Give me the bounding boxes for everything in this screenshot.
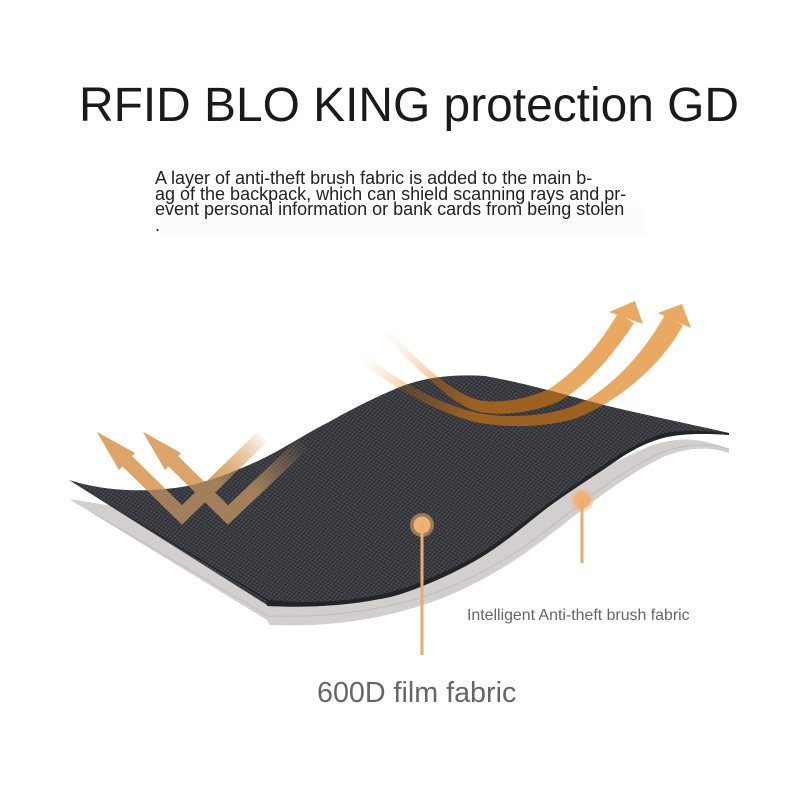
- fabric layers illustration: [69, 301, 729, 655]
- label: 600D film fabric: 600D film fabric: [317, 677, 516, 709]
- description text: .: [155, 215, 160, 235]
- orange tint over fabric: [398, 377, 604, 426]
- dark anti-theft fabric layer: [69, 375, 729, 606]
- description text: event personal information or bank cards from being stolen: [155, 199, 624, 219]
- callout marker: 600D film fabric: [410, 513, 434, 655]
- arrows over fabric: [97, 432, 305, 515]
- label: Intelligent Anti-theft brush fabric: Intelligent Anti-theft brush fabric: [467, 607, 690, 624]
- description text: ag of the backpack, which can shield scanning rays and pr-: [155, 184, 626, 204]
- arrows behind fabric: [97, 301, 691, 515]
- grey 600D film layer: [69, 440, 729, 625]
- text backdrop smudge: [160, 207, 645, 236]
- description text: A layer of anti-theft brush fabric is added to the main b-: [155, 168, 592, 188]
- callout marker: anti-theft brush fabric: [570, 488, 594, 563]
- film layer highlight: [93, 445, 729, 616]
- fabric dark edge: [69, 431, 729, 607]
- title: RFID BLO KING protection GD: [79, 79, 739, 132]
- description text: [155, 168, 626, 235]
